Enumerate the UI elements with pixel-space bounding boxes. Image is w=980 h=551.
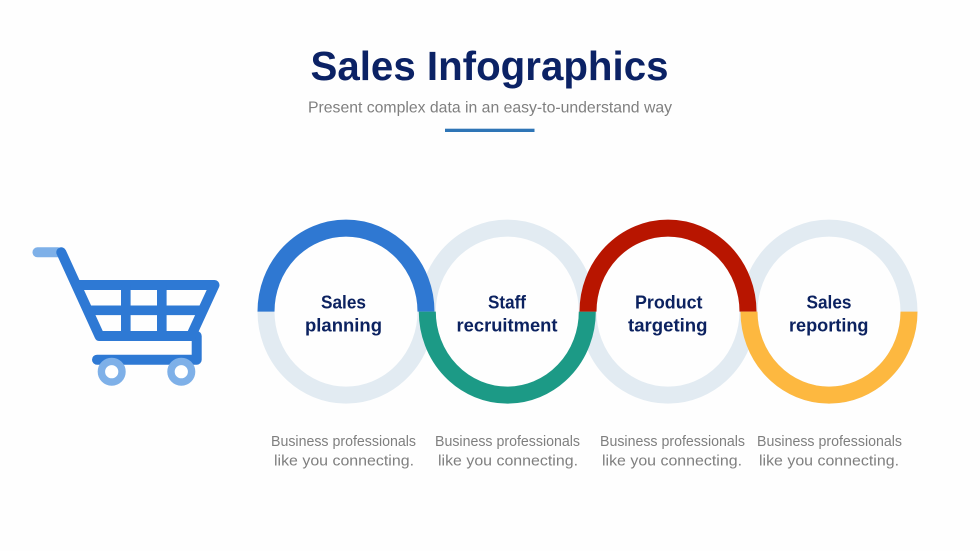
step 2 description: Business professionals (435, 433, 580, 450)
step 3 description: Business professionals (600, 433, 745, 450)
subtitle: Present complex data in an easy-to-understand way (308, 100, 672, 116)
step 2 description: like you connecting. (438, 452, 578, 470)
arc: sales planning (266, 228, 426, 312)
coloured ring arcs (266, 228, 909, 395)
step 1 description (271, 433, 416, 470)
title underline (445, 129, 534, 132)
arc: sales reporting (749, 312, 909, 395)
step 3 label: Product (635, 292, 702, 312)
step 4 description (757, 433, 902, 470)
step 4 description: like you connecting. (759, 452, 899, 470)
cart wheel right (171, 361, 192, 382)
step 2 description (435, 433, 580, 470)
cart wheel left (101, 361, 122, 382)
cart frame (61, 252, 214, 360)
title: Sales Infographics (310, 43, 668, 89)
step 1 label: planning (305, 314, 382, 336)
step 4 label: Sales (806, 292, 852, 312)
arc: product targeting (588, 228, 748, 312)
ring tracks (266, 228, 909, 395)
step 1 label (305, 292, 382, 336)
step 3 label (628, 292, 708, 336)
step 2 label (456, 292, 558, 336)
step 1 description: like you connecting. (274, 452, 414, 470)
step 2 label: recruitment (456, 314, 558, 336)
step 3 label: targeting (628, 314, 708, 336)
step 1 description: Business professionals (271, 433, 416, 450)
step 3 description (600, 433, 745, 470)
arc: staff recruitment (427, 312, 587, 395)
step 1 label: Sales (321, 292, 366, 312)
cart handle grip (38, 247, 58, 257)
step 4 description: Business professionals (757, 433, 902, 450)
step 2 label: Staff (488, 292, 527, 312)
icon: shopping cart (38, 252, 214, 382)
step 3 description: like you connecting. (602, 452, 742, 470)
step 4 label (789, 292, 868, 336)
step 4 label: reporting (789, 314, 868, 336)
